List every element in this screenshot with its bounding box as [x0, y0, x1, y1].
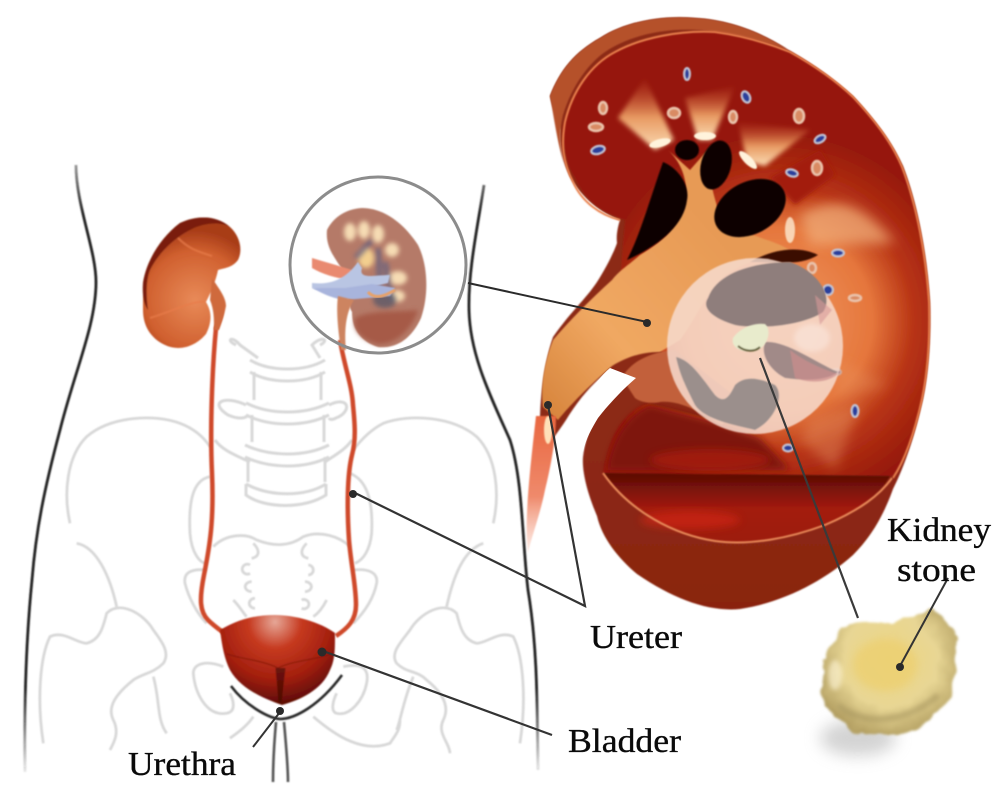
- lower wall: [603, 473, 890, 543]
- ureter right: [336, 340, 356, 636]
- blue vessels: [590, 68, 858, 452]
- magnifier ring: [290, 177, 466, 353]
- calyx cavities: [627, 137, 818, 263]
- pale vessels: [589, 102, 861, 301]
- white notch: [579, 368, 636, 452]
- body outline: [25, 165, 538, 772]
- ureter left: [201, 295, 228, 636]
- callout line: kidney stone: [896, 578, 948, 671]
- large kidney stone: [820, 608, 958, 756]
- callout lines: ureter: [349, 401, 585, 606]
- red band between pyramids: [770, 150, 835, 205]
- label: Kidney stone: Kidney: [887, 512, 991, 549]
- lower wall rim: [603, 473, 892, 543]
- lower pelvis flap: [622, 350, 740, 425]
- magnifier circle with kidney: [290, 177, 466, 353]
- small stone in kidney: [733, 324, 769, 352]
- callout line: bladder: [318, 648, 552, 735]
- label: Bladder: Bladder: [568, 723, 682, 760]
- pelvis and spine skeleton: [40, 339, 523, 753]
- renal pelvis: [542, 145, 790, 420]
- pyramids: [618, 78, 810, 166]
- kidney outer capsule: [540, 17, 930, 609]
- callout line: kidney pelvis: [468, 283, 651, 327]
- bladder: [220, 615, 335, 705]
- ureter big: [527, 416, 556, 553]
- label: Kidney stone: stone: [897, 552, 976, 589]
- label: Kidney stone: [887, 512, 991, 589]
- translucent magnifier with stone: [667, 258, 843, 434]
- capsule inner line: [563, 32, 929, 478]
- lower cavity shading: [607, 405, 790, 470]
- urethra outlines: [231, 675, 342, 782]
- large kidney cross-section: [527, 17, 930, 609]
- callout line: stone in kidney: [760, 358, 858, 618]
- outer rim highlight: [550, 17, 787, 177]
- left kidney: [143, 217, 240, 348]
- stone shadow: [820, 720, 896, 756]
- callout line: urethra: [253, 707, 284, 747]
- label: Urethra: Urethra: [128, 746, 236, 783]
- kidney interior: [563, 32, 929, 476]
- label: Ureter: Ureter: [590, 619, 683, 656]
- spine vertebrae: [215, 339, 352, 506]
